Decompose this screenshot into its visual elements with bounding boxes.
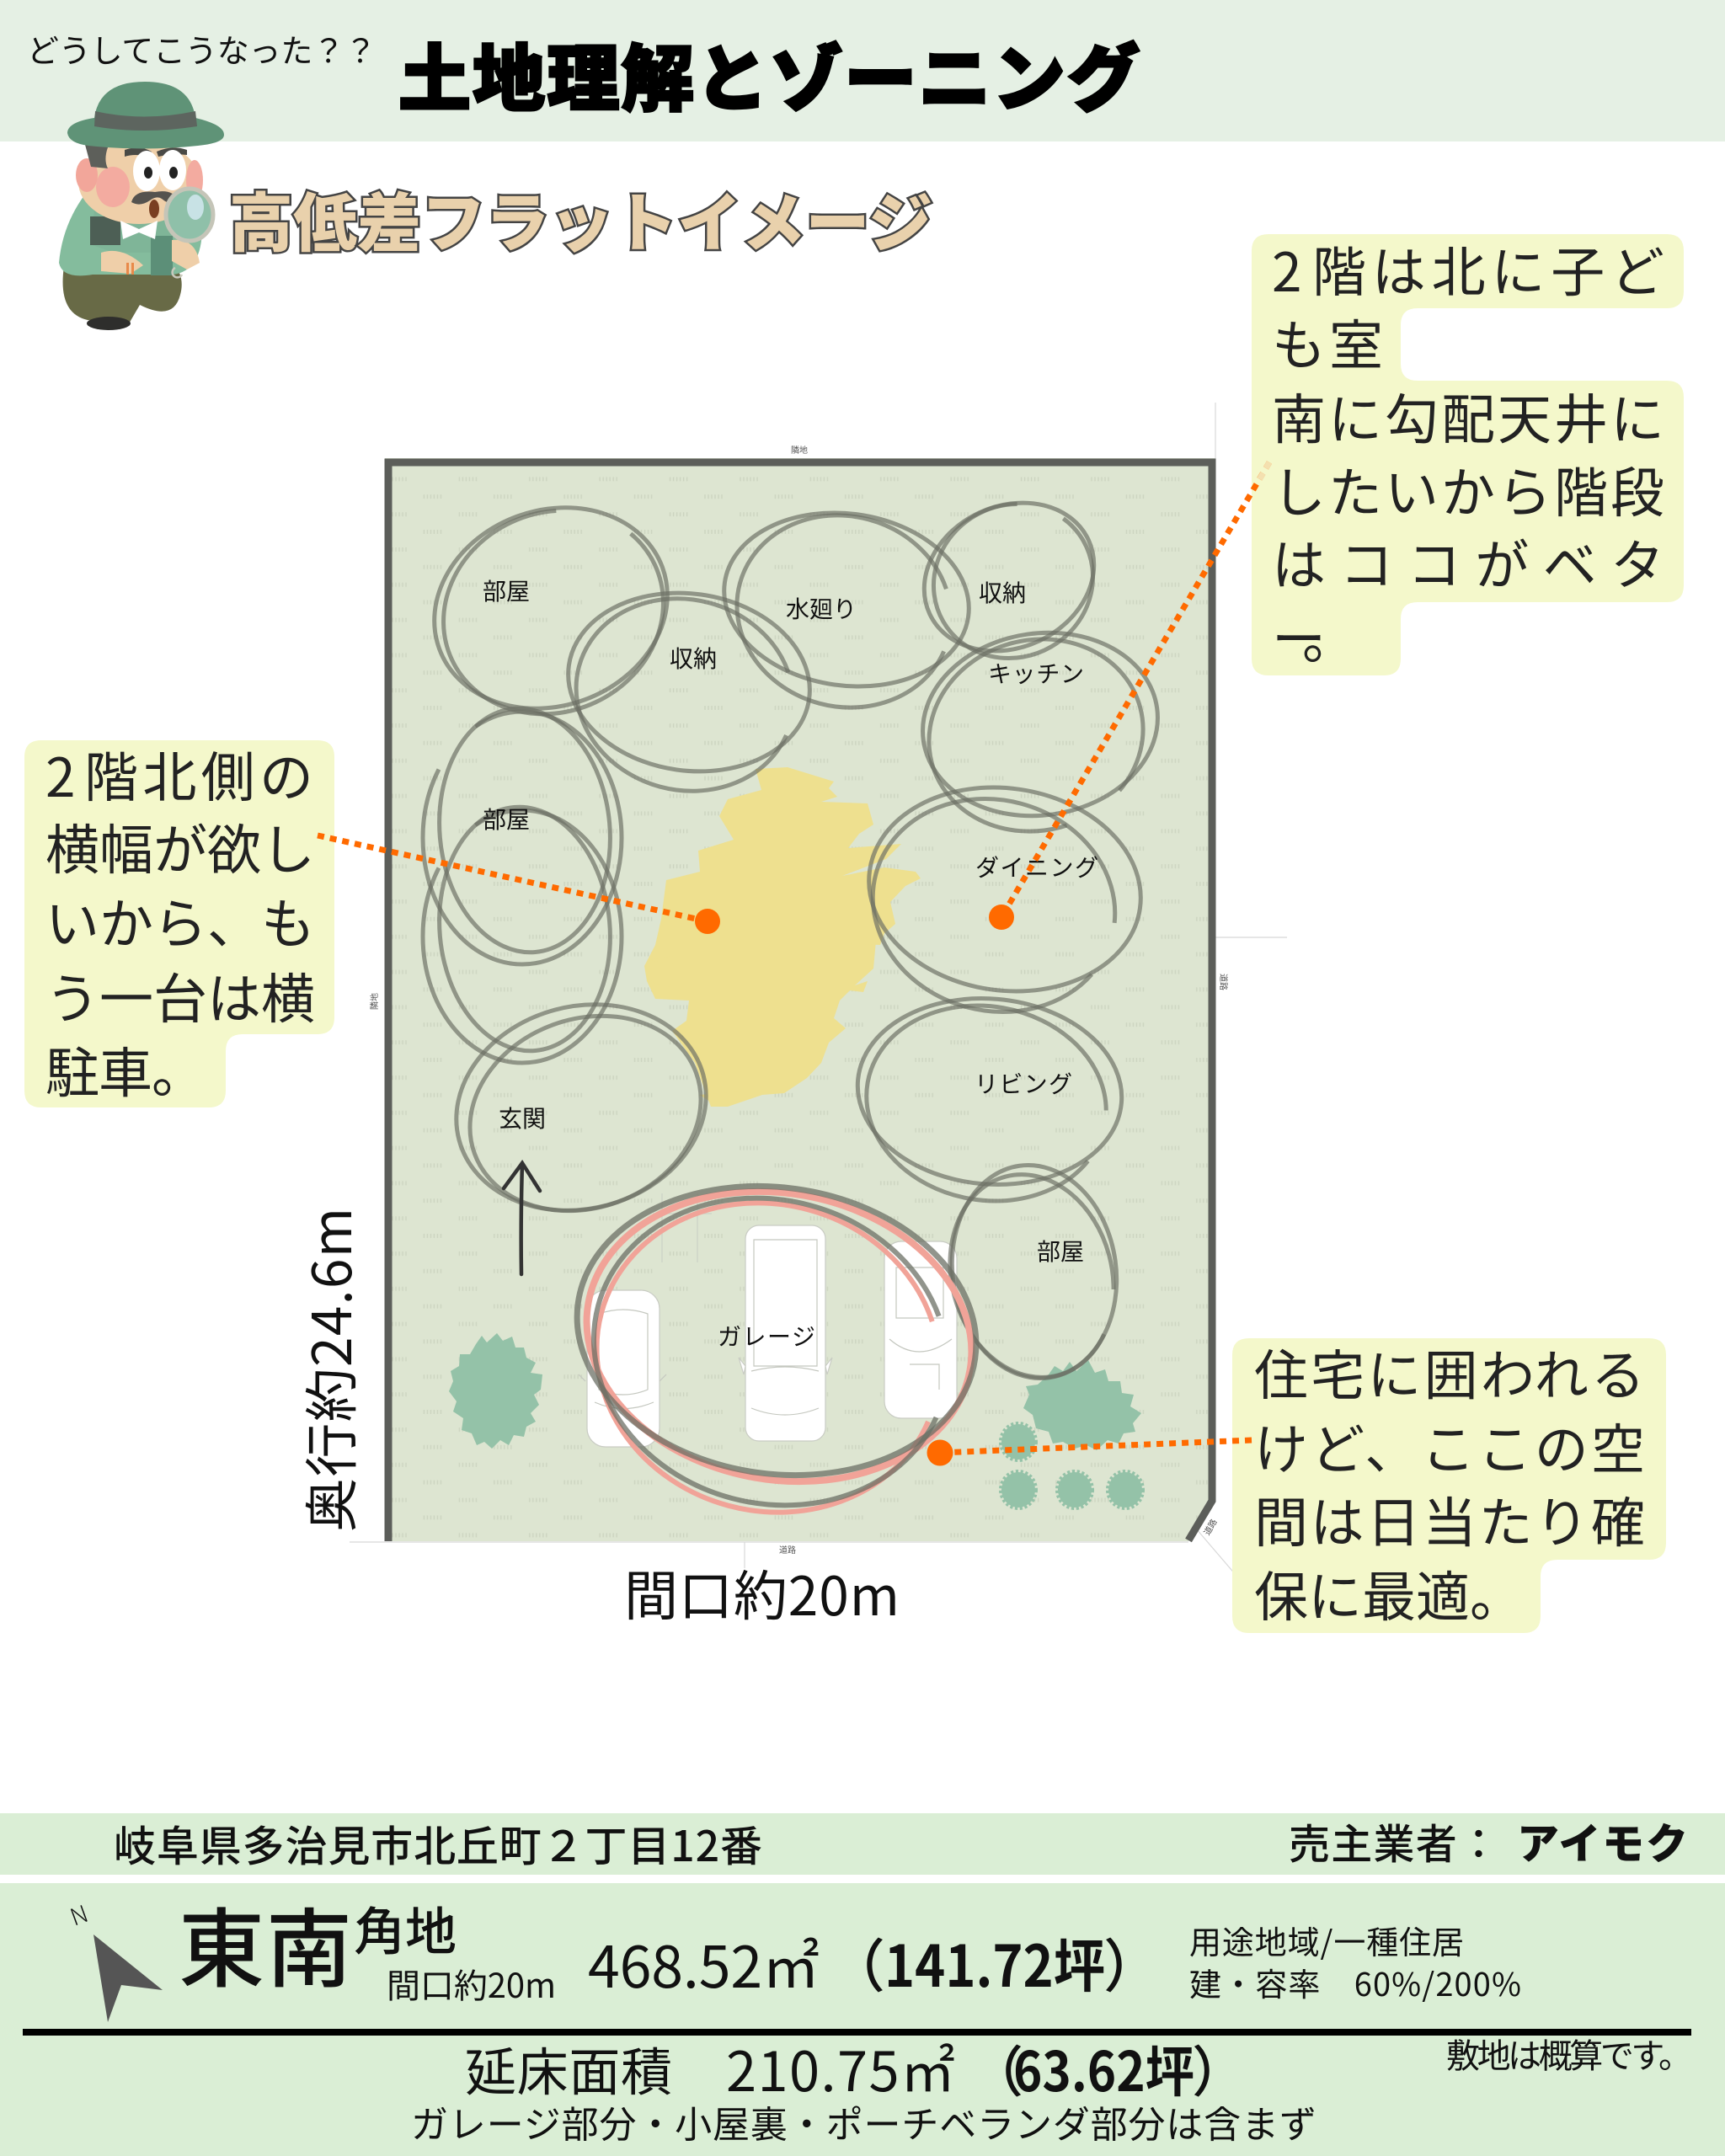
land area tsubo: ） <box>1103 1920 1161 2004</box>
callout: north side width: う一台は横 <box>45 957 315 1034</box>
callout: north side upper floor: 2 <box>1272 230 1302 307</box>
neighbour and road labels: 隣地 <box>791 443 808 456</box>
site ground <box>385 458 1215 1541</box>
callout: north side upper floor: 南に勾配天井に <box>1272 377 1664 455</box>
room labels: 収納 <box>670 641 717 675</box>
subtitle: 高低差フラットイメージ <box>229 172 932 264</box>
neighbour and road labels: 道路 <box>779 1543 796 1556</box>
callout: north side upper floor: ー。 <box>1272 597 1356 675</box>
title: 土地理解とゾーニング <box>398 20 1140 125</box>
yellow open area <box>644 767 921 1107</box>
sketch: kitchen <box>907 616 1170 855</box>
callout: north side width: 横幅が欲し <box>45 808 315 885</box>
icon: north arrow <box>65 1896 163 2022</box>
room labels: キッチン <box>988 656 1084 690</box>
divider <box>23 2029 1691 2036</box>
callout: north side width <box>24 735 334 1108</box>
tree: small row 2 <box>1058 1472 1092 1508</box>
floor area tsubo: （ <box>969 2028 1023 2107</box>
neighbour and road labels: 道路 <box>1218 974 1231 990</box>
address band <box>0 1811 1725 1875</box>
arrow: to garage corner <box>927 1440 1252 1465</box>
car: centre <box>739 1225 832 1441</box>
tree: large <box>1023 1360 1141 1450</box>
callout: north side width: 駐車。 <box>45 1031 206 1108</box>
callout: north side width: 2 <box>45 735 76 813</box>
panel: land data <box>0 1881 1725 2156</box>
dimension label: depth: 奥行約24.6m <box>290 1208 367 1532</box>
corner lot: 角地 <box>354 1890 457 1965</box>
sketch: garage <box>558 1159 995 1550</box>
room labels <box>483 574 1098 1353</box>
parking markings <box>653 1193 712 1262</box>
floor area label: 延床面積 <box>465 2031 672 2105</box>
land area: 468.52㎡ <box>588 1921 820 2004</box>
seller label: 売主業者： <box>1289 1812 1499 1871</box>
callout: north side upper floor: したいから階段 <box>1272 451 1664 528</box>
exclusions note: ガレージ部分・小屋裏・ポーチベランダ部分は含まず <box>411 2095 1316 2148</box>
tree: small centre <box>1001 1424 1035 1460</box>
callout: sunlight: 保に最適。 <box>1254 1555 1524 1632</box>
sketch: entrance <box>433 977 729 1242</box>
tree: left <box>449 1333 542 1449</box>
callout: north side width: 階北側の <box>84 735 313 813</box>
room labels: 部屋 <box>483 574 530 607</box>
callout: sunlight: 住宅に囲われる <box>1254 1333 1645 1411</box>
callout: north side width: いから、も <box>45 882 315 959</box>
arrow: to open area <box>318 835 720 934</box>
address: 岐阜県多治見市北丘町２丁目12番 <box>114 1813 762 1874</box>
arrow: to dining <box>989 462 1269 930</box>
site note: 敷地は概算です。 <box>1446 2029 1692 2078</box>
sketch: living <box>850 987 1130 1219</box>
entrance arrow <box>504 1163 540 1274</box>
callout: sunlight <box>1232 1333 1666 1633</box>
floor area tsubo: 63.62坪 <box>1013 2028 1194 2107</box>
header question text: どうしてこうなった？？ <box>27 25 377 72</box>
sketch: storage right <box>900 475 1121 687</box>
sketch: room top left <box>406 475 697 750</box>
orientation: 東南 <box>179 1881 352 2005</box>
zoning: 用途地域/一種住居 <box>1189 1917 1464 1963</box>
land area tsubo: （ <box>828 1920 885 2004</box>
site boundary walls <box>388 462 1212 1541</box>
tree: small row 3 <box>1108 1472 1142 1508</box>
sketch: storage centre <box>554 574 821 815</box>
icon: detective character <box>59 82 224 330</box>
sketch: room left lower <box>423 800 622 1063</box>
room labels: ガレージ <box>718 1319 815 1353</box>
land area tsubo: 141.72坪 <box>884 1920 1105 2004</box>
sketch: dining <box>849 771 1154 1038</box>
dimension label: frontage: 間口約20m <box>624 1554 900 1631</box>
neighbour and road labels: 隣地 <box>367 993 380 1010</box>
icon: north arrow: N <box>65 1896 93 1933</box>
sketch: room bottom right <box>928 1155 1135 1396</box>
callout: north side upper floor: 階は北に子ど <box>1312 230 1664 307</box>
sketch: room left upper <box>423 702 622 964</box>
room labels: 部屋 <box>1037 1234 1084 1267</box>
room labels: ダイニング <box>975 850 1098 883</box>
car: left <box>579 1290 666 1447</box>
tree: small row 1 <box>1001 1472 1035 1508</box>
room labels: 水廻り <box>786 591 857 625</box>
coverage ratio: 建・容率 60%/200% <box>1189 1959 1521 2005</box>
callout: north side upper floor <box>1252 230 1684 675</box>
sketch: wet area <box>713 492 980 731</box>
car: right <box>884 1241 957 1418</box>
room labels: 収納 <box>979 575 1026 609</box>
callout: sunlight: 間は日当たり確 <box>1254 1481 1645 1558</box>
room labels: 部屋 <box>483 802 530 835</box>
seller name: アイモク <box>1517 1811 1688 1871</box>
header band <box>0 0 1725 141</box>
neighbour and road labels <box>367 443 1231 1556</box>
callout: north side upper floor: はココがベタ <box>1272 523 1664 600</box>
callout: north side upper floor: も室 <box>1272 303 1383 381</box>
frontage: 間口約20m <box>387 1959 556 2008</box>
floor area value: 210.75㎡ <box>726 2028 955 2107</box>
floor area tsubo: ） <box>1192 2028 1247 2107</box>
callout: sunlight: けど、ここの空 <box>1254 1407 1645 1485</box>
room labels: 玄関 <box>499 1101 546 1134</box>
neighbour and road labels: 道路 <box>1200 1516 1220 1537</box>
panel: site plan <box>350 403 1287 1588</box>
room labels: リビング <box>975 1066 1072 1100</box>
